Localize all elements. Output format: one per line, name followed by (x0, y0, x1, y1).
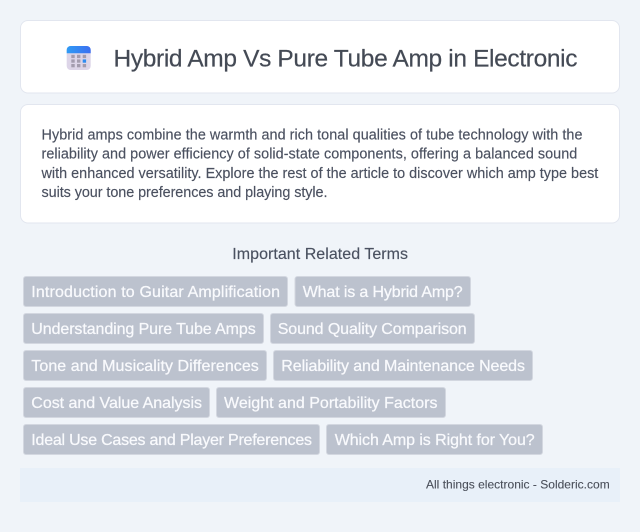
panel: description (20, 104, 620, 223)
tag: weight (216, 388, 446, 418)
footer text: All things electronic - Solderic.com (426, 478, 610, 492)
tag: use cases: Ideal Use Cases and Player Preferences (31, 432, 312, 449)
text block: description (40, 127, 598, 201)
text block: description: suits your tone preferences and playing style. (42, 185, 328, 201)
tag: tone (24, 350, 266, 380)
tag: pure tube (24, 314, 264, 344)
footer (20, 468, 620, 502)
tag: use cases (24, 424, 320, 454)
tag: reliability (274, 350, 532, 380)
tag: pure tube: Understanding Pure Tube Amps (31, 321, 256, 338)
tag: weight: Weight and Portability Factors (224, 395, 438, 412)
tag list (24, 276, 542, 454)
title: Hybrid Amp Vs Pure Tube Amp in Electronic (114, 46, 578, 73)
tag: sound quality: Sound Quality Comparison (278, 321, 467, 338)
tag: sound quality (270, 314, 474, 344)
text block: description: reliability and power efficiency of solid-state components, offering a balanced sound (42, 147, 577, 163)
tag: cost (24, 388, 210, 418)
tag: introduction (24, 276, 288, 306)
text block: description: with enhanced versatility. Explore the rest of the article to discover which amp type best (40, 166, 598, 182)
tag: which amp: Which Amp is Right for You? (335, 432, 535, 449)
text block: description: Hybrid amps combine the warmth and rich tonal qualities of tube technology with the (42, 127, 582, 143)
tag: reliability: Reliability and Maintenance Needs (281, 358, 525, 375)
heading: important related terms: Important Related Terms (232, 246, 408, 263)
tag: introduction: Introduction to Guitar Amplification (31, 284, 280, 301)
tag: tone: Tone and Musicality Differences (31, 358, 259, 375)
icon: calendar (67, 46, 91, 70)
tag: which amp (326, 424, 542, 454)
panel: header (20, 20, 620, 93)
tag: hybrid amp: What is a Hybrid Amp? (303, 284, 463, 301)
tag: hybrid amp (295, 276, 470, 306)
tag: cost: Cost and Value Analysis (31, 395, 202, 412)
